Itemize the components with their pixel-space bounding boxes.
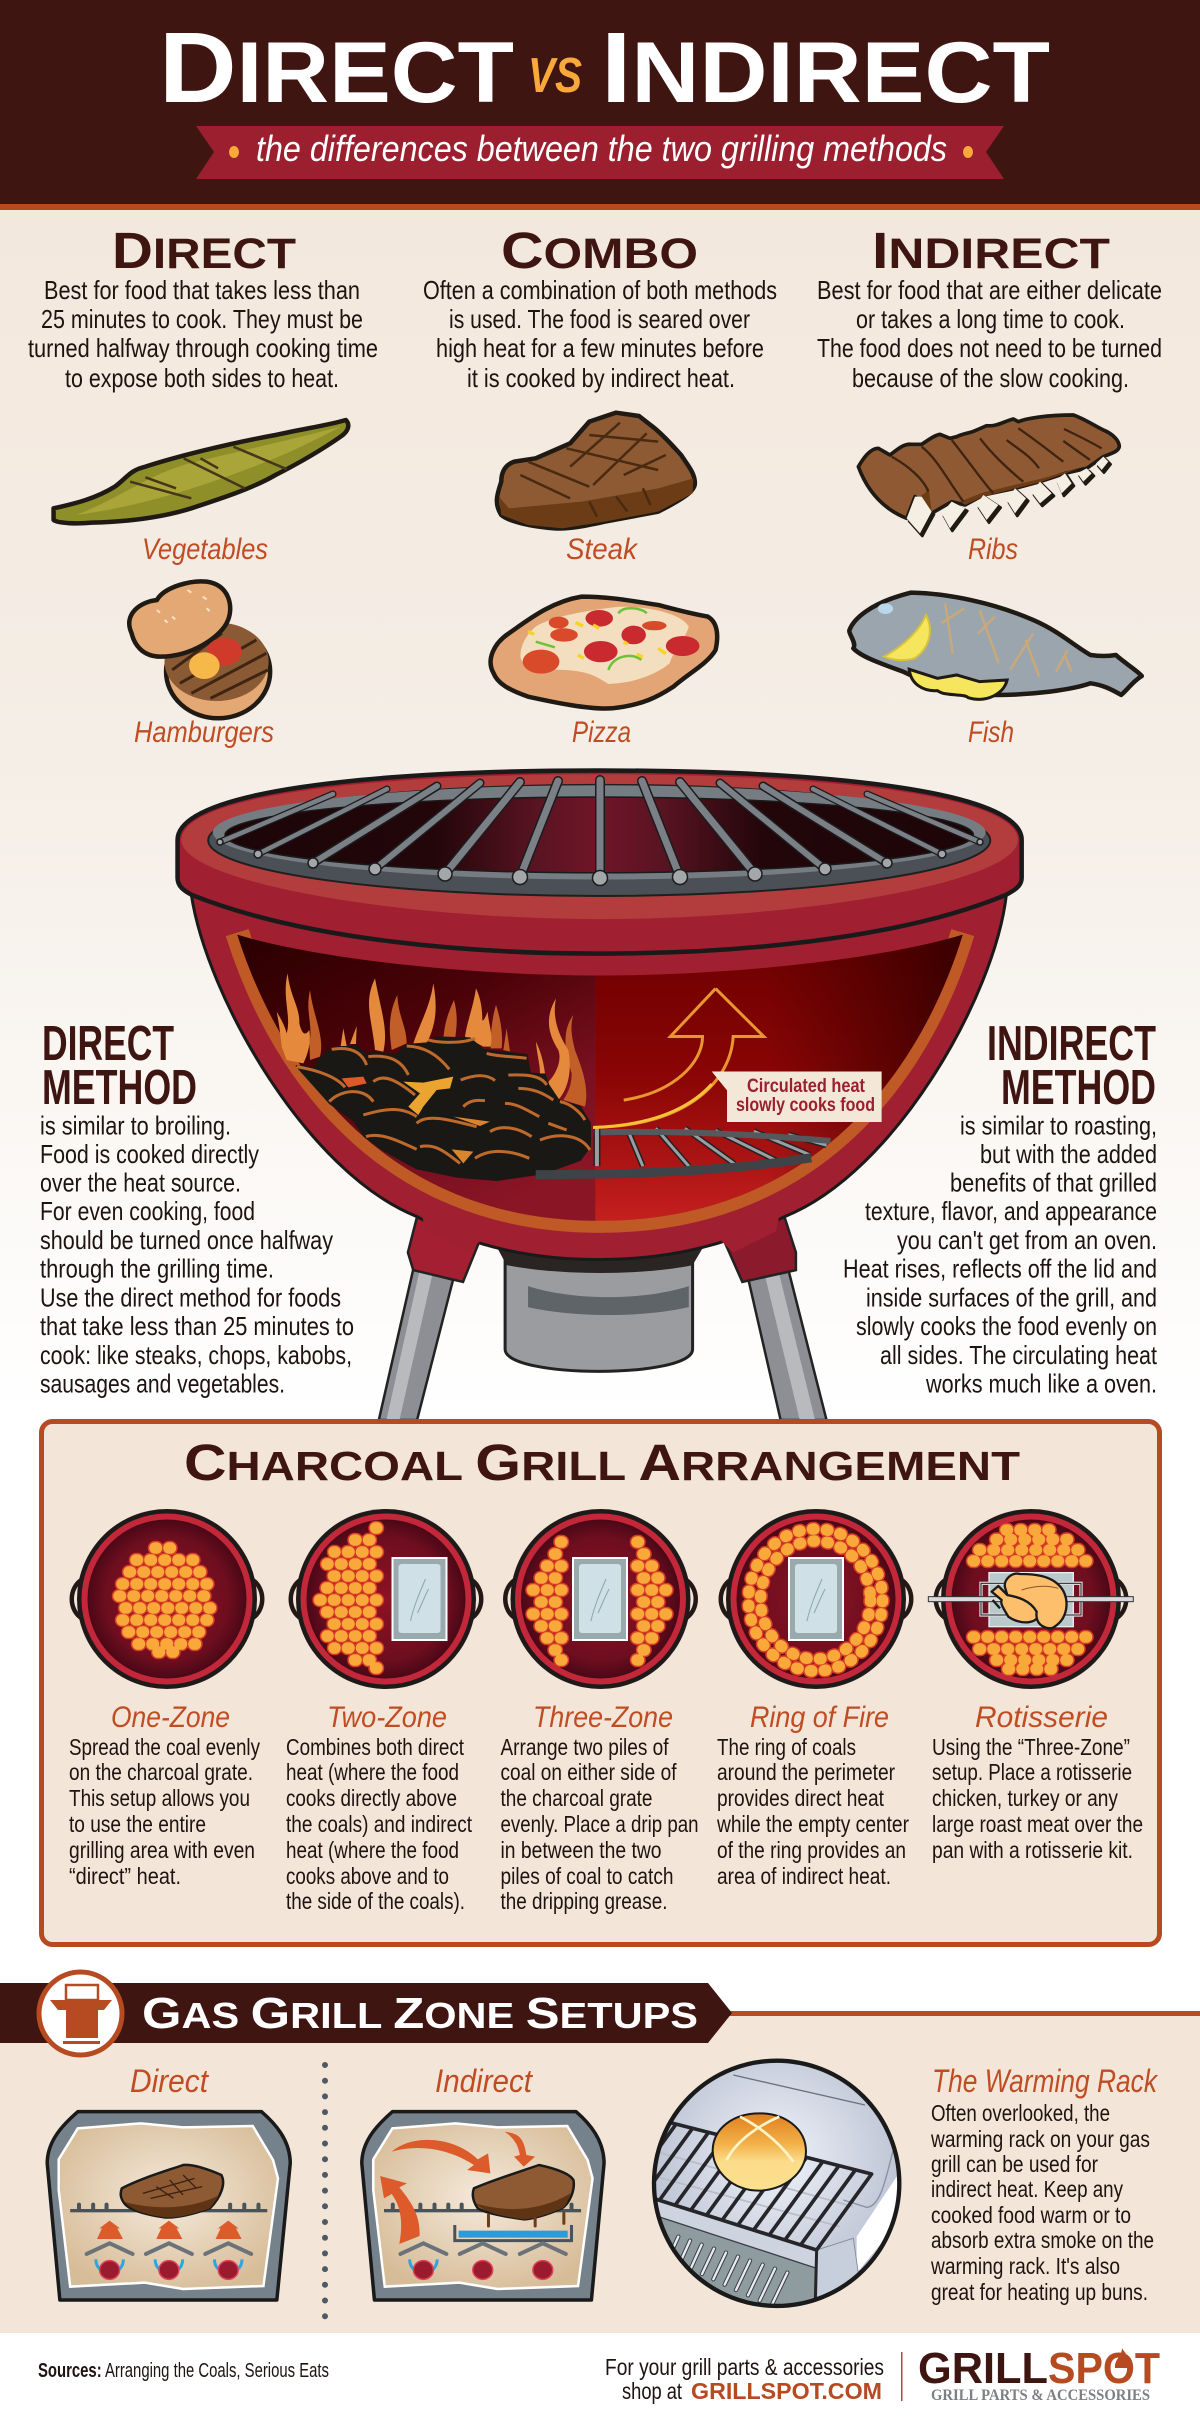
- text: direct method: sausages and vegetables.: [40, 1369, 285, 1399]
- logo: grillspot: GRILL PARTS & ACCESSORIES: [931, 2387, 1150, 2404]
- text: rotisserie: large roast meat over the: [932, 1811, 1143, 1837]
- text: direct method: METHOD: [42, 1061, 197, 1115]
- text: rotisserie: setup. Place a rotisserie: [932, 1759, 1132, 1785]
- grate ring: [208, 785, 990, 896]
- icon: vegetables: [54, 420, 348, 523]
- diagrams: gas grill zones: [47, 2112, 604, 2300]
- logo: grillspot: SPOT: [1048, 2344, 1160, 2393]
- zone labels: Three-Zone: [533, 1701, 673, 1734]
- text: three-zone: the dripping grease.: [500, 1888, 668, 1914]
- food labels: Hamburgers: [134, 716, 274, 749]
- text: three-zone: in between the two: [500, 1837, 662, 1863]
- title: direct vs indirect: VS: [528, 49, 582, 103]
- text: rotisserie: pan with a rotisserie kit.: [932, 1837, 1133, 1863]
- zone labels: Ring of Fire: [750, 1701, 889, 1734]
- text: ring of fire: area of indirect heat.: [717, 1863, 891, 1889]
- panel: direct column text: Best for food that takes less than: [44, 275, 360, 305]
- bun: [713, 2113, 806, 2191]
- food labels: Ribs: [968, 533, 1018, 566]
- text: two-zone: the coals) and indirect: [286, 1811, 473, 1837]
- illustration: warming rack: [652, 2058, 902, 2308]
- text: two-zone: the side of the coals).: [286, 1888, 465, 1914]
- text: one-zone: on the charcoal grate.: [69, 1759, 253, 1785]
- panel: direct column text: DIRECT: [112, 222, 296, 279]
- divider line: [725, 2011, 1200, 2016]
- text: the warming rack: cooked food warm or to: [931, 2202, 1131, 2228]
- text: the warming rack: Often overlooked, the: [931, 2100, 1110, 2126]
- grill lid rim: [178, 771, 1022, 954]
- panel: combo column text: it is cooked by indirect heat.: [467, 363, 735, 393]
- zone labels: Two-Zone: [327, 1701, 447, 1734]
- text: direct method: Use the direct method for foods: [40, 1282, 341, 1312]
- text: indirect method: [843, 1017, 1158, 1399]
- text: the warming rack: warming rack. It's also: [930, 2253, 1120, 2279]
- text: the warming rack: great for heating up buns.: [931, 2279, 1148, 2305]
- text: indirect method: works much like a oven.: [925, 1369, 1157, 1399]
- cooking grate: [536, 1128, 830, 1175]
- title: direct vs indirect: INDIRECT: [601, 12, 1050, 124]
- footer divider: [901, 2352, 902, 2401]
- icon: gas grill badge: [39, 1972, 122, 2055]
- subtitle ribbon: the differences between the two grilling methods: [256, 128, 947, 169]
- callout: circulated heat: [712, 1071, 882, 1122]
- grill bowl: [191, 895, 1006, 1260]
- banner: gas grill zone setups: [0, 1983, 732, 2043]
- text: ring of fire: while the empty center: [716, 1811, 909, 1837]
- grill interior: [214, 928, 978, 1223]
- icon: fish: [849, 593, 1142, 699]
- text: three-zone: evenly. Place a drip pan: [500, 1811, 698, 1837]
- title: direct vs indirect: DIRECT: [159, 12, 514, 124]
- page background: [0, 210, 1200, 1420]
- diagram: gas indirect: [362, 2112, 604, 2300]
- panel: indirect column text: INDIRECT: [872, 222, 1110, 279]
- panel: indirect column text: or takes a long time to cook.: [856, 304, 1125, 334]
- text: direct method: Food is cooked directly: [40, 1139, 259, 1169]
- text: direct method: should be turned once halfway: [40, 1225, 333, 1255]
- illustration: grill legs, ash catcher and bowl: [191, 895, 1006, 1420]
- zone labels: [111, 1701, 1108, 1734]
- text: one-zone: grilling area with even: [69, 1837, 255, 1863]
- illustration: flames and charcoal: [277, 973, 590, 1180]
- food labels: Fish: [968, 716, 1014, 749]
- footer sources: Sources: Arranging the Coals, Serious Eats: [38, 2360, 329, 2382]
- text: the warming rack: warming rack on your gas: [930, 2126, 1150, 2152]
- heading: charcoal grill arrangement: CHARCOAL GRILL ARRANGEMENT: [184, 1434, 1020, 1491]
- footer call to action: [605, 2354, 884, 2404]
- food labels: Pizza: [572, 716, 631, 749]
- text: the warming rack: absorb extra smoke on the: [931, 2227, 1154, 2253]
- text: direct method: is similar to broiling.: [40, 1111, 231, 1141]
- text: direct method: For even cooking, food: [40, 1196, 255, 1226]
- text: one-zone: Spread the coal evenly: [69, 1734, 260, 1760]
- panel: gas section background: [0, 2013, 1200, 2333]
- logo: grillspot: [918, 2344, 1160, 2404]
- rim highlight: [181, 774, 1018, 919]
- gas setup labels: [130, 2063, 533, 2099]
- icon: steak: [497, 413, 695, 528]
- banner: gas grill zone setups: GAS GRILL ZONE SETUPS: [142, 1989, 698, 2038]
- text: direct method: cook: like steaks, chops, kabobs,: [40, 1340, 352, 1370]
- icon: ribs: [858, 415, 1119, 536]
- panel: combo column text: high heat for a few minutes before: [436, 333, 764, 363]
- diagram: gas direct: [47, 2112, 290, 2300]
- logo: grillspot: GRILL: [918, 2344, 1048, 2393]
- text: the warming rack: [930, 2063, 1159, 2305]
- text: one-zone: to use the entire: [69, 1811, 206, 1837]
- panel: combo column text: [423, 222, 777, 393]
- charcoal pile: [297, 1037, 590, 1180]
- diagram: two-zone: [291, 1509, 481, 1689]
- callout text: slowly cooks food: [736, 1095, 875, 1116]
- diagram: ring of fire: [721, 1509, 911, 1689]
- grill interior through grate: [225, 797, 973, 873]
- text: indirect method: benefits of that grilled: [950, 1167, 1157, 1197]
- text: direct method: [40, 1017, 354, 1399]
- callout text: Circulated heat: [747, 1076, 866, 1097]
- text: one-zone: [69, 1734, 260, 1889]
- text: one-zone: “direct” heat.: [69, 1863, 181, 1889]
- footer call to action: For your grill parts & accessories: [605, 2354, 884, 2380]
- text: rotisserie: chicken, turkey or any: [932, 1785, 1118, 1811]
- orange inner rim: [237, 933, 963, 1221]
- text: ring of fire: The ring of coals: [717, 1734, 856, 1760]
- text: rotisserie: [932, 1734, 1143, 1863]
- gas setup labels: Indirect: [435, 2063, 533, 2099]
- text: three-zone: piles of coal to catch: [500, 1863, 674, 1889]
- text: two-zone: cooks above and to: [286, 1863, 449, 1889]
- footer call to action: shop at: [622, 2378, 682, 2404]
- title: direct vs indirect: [159, 12, 1050, 124]
- text: the warming rack: grill can be used for: [931, 2151, 1098, 2177]
- food labels: Vegetables: [142, 533, 268, 566]
- dotted separator: [322, 2065, 328, 2318]
- zone labels: Rotisserie: [975, 1701, 1108, 1734]
- food labels: [134, 533, 1018, 749]
- flames: [277, 973, 586, 1107]
- icon: pizza: [491, 597, 717, 709]
- text: direct method: that take less than 25 minutes to: [40, 1311, 354, 1341]
- text: the warming rack: indirect heat. Keep any: [931, 2176, 1123, 2202]
- diagram: rotisserie: [928, 1509, 1133, 1689]
- panel: indirect column text: [817, 222, 1162, 393]
- text: direct method: over the heat source.: [40, 1167, 241, 1197]
- text: indirect method: is similar to roasting,: [960, 1111, 1157, 1141]
- text: ring of fire: around the perimeter: [717, 1759, 895, 1785]
- leg joints: [422, 1217, 779, 1252]
- panel: direct column text: [28, 222, 378, 393]
- text: direct method: through the grilling time.: [40, 1254, 274, 1284]
- grate bars: [217, 780, 983, 886]
- text: three-zone: coal on either side of: [500, 1759, 677, 1785]
- rotisserie pan, spit and chicken: [928, 1573, 1133, 1628]
- grate ring inner: [213, 785, 986, 880]
- panel: direct column text: to expose both sides to heat.: [65, 363, 339, 393]
- grill legs and ash catcher: [379, 1217, 827, 1420]
- header band: [0, 0, 1200, 210]
- arrow: circulated heat: [593, 989, 764, 1127]
- text: indirect method: but with the added: [980, 1139, 1157, 1169]
- diagram: three-zone: [505, 1509, 696, 1689]
- text: two-zone: heat (where the food: [286, 1837, 459, 1863]
- text: ring of fire: [716, 1734, 909, 1889]
- zone labels: One-Zone: [111, 1701, 230, 1734]
- panel: direct column text: 25 minutes to cook. They must be: [41, 304, 363, 334]
- text: two-zone: heat (where the food: [286, 1759, 459, 1785]
- text: two-zone: [286, 1734, 473, 1914]
- panel: direct column text: turned halfway through cooking time: [28, 333, 378, 363]
- gas setup labels: Direct: [130, 2063, 209, 2099]
- panel: indirect column text: because of the slow cooking.: [852, 363, 1129, 393]
- illustration: grill lid, grate and callout: [178, 771, 1022, 1175]
- food labels: Steak: [566, 533, 639, 566]
- text: ring of fire: of the ring provides an: [717, 1837, 906, 1863]
- panel: charcoal grill arrangement: [42, 1422, 1160, 1944]
- icon: hamburger: [129, 581, 270, 718]
- text: two-zone: cooks directly above: [286, 1785, 457, 1811]
- text: rotisserie: Using the “Three-Zone”: [932, 1734, 1130, 1760]
- text: direct method: DIRECT: [42, 1017, 174, 1071]
- text: three-zone: the charcoal grate: [500, 1785, 652, 1811]
- text: the warming rack: The Warming Rack: [932, 2063, 1159, 2099]
- food illustrations: [54, 413, 1142, 718]
- text: one-zone: This setup allows you: [69, 1785, 250, 1811]
- diagram: one-zone: [72, 1509, 262, 1689]
- panel: combo column text: Often a combination of both methods: [423, 275, 777, 305]
- panel: combo column text: COMBO: [501, 222, 698, 279]
- footer call to action: GRILLSPOT.COM: [691, 2378, 882, 2404]
- text: two-zone: Combines both direct: [286, 1734, 464, 1760]
- text: ring of fire: provides direct heat: [717, 1785, 884, 1811]
- text: three-zone: [500, 1734, 698, 1914]
- callout text: [736, 1076, 875, 1116]
- panel: combo column text: is used. The food is seared over: [449, 304, 750, 334]
- text: three-zone: Arrange two piles of: [500, 1734, 669, 1760]
